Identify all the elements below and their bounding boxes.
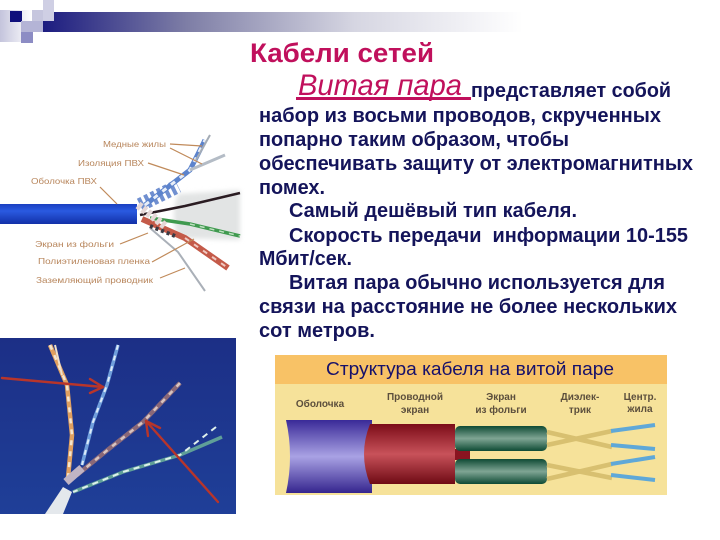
green pair (73, 437, 222, 492)
body text: связи на расстояние не более нескольких (259, 296, 677, 318)
red shield (364, 424, 455, 484)
part labels: Проводной (387, 392, 443, 403)
body text: обеспечивать защиту от электромагнитных (259, 153, 693, 175)
body text: попарно таким образом, чтобы (259, 129, 569, 151)
blue pair (82, 345, 118, 465)
title: Кабели сетей (250, 38, 434, 68)
wire bundle (138, 135, 240, 291)
body text: набор из восьми проводов, скрученных (259, 105, 661, 127)
body text: сот метров. (259, 320, 375, 342)
photo: labelled cable cross-section (0, 135, 240, 291)
blue wire tips (611, 425, 655, 480)
body text: Мбит/сек. (259, 248, 352, 270)
body text: Самый дешёвый тип кабеля. (289, 200, 577, 222)
body text: помех. (259, 177, 325, 199)
green foil lower (455, 459, 547, 484)
orange pair (50, 345, 72, 478)
diagram heading (275, 355, 667, 384)
part labels: из фольги (475, 404, 527, 416)
photo: labelled cable cross-section: Экран из фольги (35, 239, 114, 249)
callout labels: Медные жилы (103, 139, 166, 149)
diagram background (275, 384, 667, 495)
photo: twisted pairs on blue background (0, 338, 236, 514)
green foil upper (455, 426, 547, 451)
brown pair (77, 383, 180, 475)
wire base (66, 468, 82, 482)
decorative corner squares (0, 0, 54, 43)
photo: labelled cable cross-section: Изоляция ПВХ (78, 158, 144, 168)
callout arrows (100, 144, 202, 278)
red shield tab between pairs (455, 449, 470, 460)
body text: Скорость передачи информации 10-155 (289, 225, 688, 247)
part labels: жила (626, 404, 653, 415)
header gradient bar (43, 12, 523, 32)
yellow dielectric crossings (547, 431, 612, 479)
red arrows (2, 378, 218, 502)
part labels: Оболочка (296, 398, 345, 410)
body text: Витая пара обычно используется для (289, 272, 665, 294)
blue cable sheath (0, 204, 137, 224)
diagram heading: Структура кабеля на витой паре (326, 359, 614, 379)
photo: labelled cable cross-section: Полиэтиленовая пленка (38, 256, 150, 266)
cable stub (45, 487, 72, 514)
part labels: Центр. (624, 392, 657, 403)
photo: labelled cable cross-section: Оболочка ПВХ (31, 176, 97, 186)
body text: представляет собой (471, 80, 671, 102)
body text (259, 80, 693, 342)
part labels: Диэлек- (561, 392, 599, 403)
part labels: Экран (486, 392, 516, 403)
purple sheath (286, 420, 372, 493)
subtitle term: Витая пара (298, 69, 462, 102)
part labels: экран (401, 405, 429, 416)
part labels: трик (569, 405, 592, 416)
photo: labelled cable cross-section: Заземляющий проводник (36, 275, 153, 285)
diagram: cable structure (275, 355, 667, 495)
white insulation film (174, 190, 240, 240)
part labels (296, 392, 657, 416)
